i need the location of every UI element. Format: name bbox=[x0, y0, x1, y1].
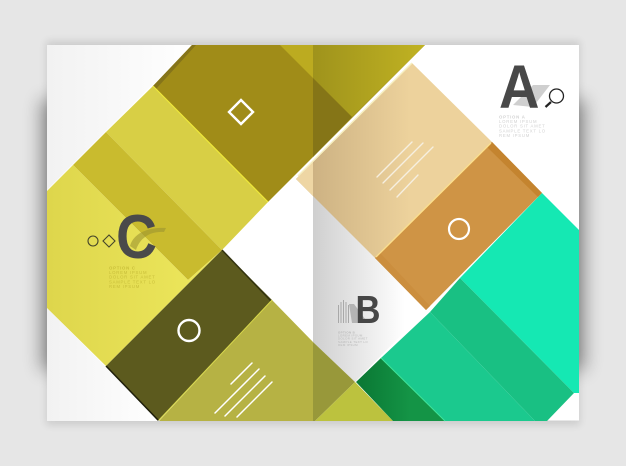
page bbox=[47, 45, 579, 420]
icon: text lines bbox=[377, 142, 433, 197]
panel: orange band with circle bbox=[375, 142, 542, 310]
text block: option A: DOLOR SIT AMET bbox=[499, 124, 545, 129]
heading: letter B: B bbox=[356, 289, 380, 332]
text block: option A bbox=[499, 114, 546, 138]
icon: bars bbox=[338, 300, 348, 323]
text block: option B: DOLOR SIT AMET bbox=[338, 337, 368, 341]
text block: option C bbox=[109, 266, 156, 289]
text block: option C: DOLOR SIT AMET bbox=[109, 275, 155, 280]
panel: light olive with lines bbox=[159, 300, 393, 421]
letter shadow: B bbox=[349, 304, 368, 323]
text block: option C: LOREM IPSUM bbox=[109, 270, 147, 275]
icon: magnifier bbox=[546, 89, 564, 107]
text block: option B: REM IPSUM bbox=[338, 343, 358, 347]
panel: teal square bbox=[356, 193, 579, 421]
letter shadow: A bbox=[513, 85, 550, 107]
letter block: B bbox=[338, 289, 380, 347]
white panel: bottom left bbox=[47, 308, 160, 421]
page shadow bbox=[41, 41, 585, 425]
icon: diamond bbox=[229, 100, 253, 124]
panel: dark olive band with circle bbox=[106, 250, 272, 421]
panel: tan square with lines bbox=[296, 63, 492, 258]
text block: option B: SAMPLE TEXT LO bbox=[338, 340, 368, 344]
icon: small diamond bbox=[103, 235, 115, 247]
panel: yellow band with letter C bbox=[47, 86, 268, 366]
white panel: top left bbox=[47, 45, 192, 190]
text block: option C: SAMPLE TEXT LO bbox=[109, 279, 156, 284]
letter block: A bbox=[499, 53, 564, 138]
icon: circle bbox=[449, 219, 469, 239]
text block: option B: OPTION B bbox=[338, 330, 355, 334]
heading: letter A: A bbox=[499, 53, 540, 121]
panel: olive square with diamond bbox=[153, 45, 425, 202]
text block: option B bbox=[338, 330, 368, 347]
text block: option C: REM IPSUM bbox=[109, 284, 140, 289]
text block: option A: REM IPSUM bbox=[499, 133, 530, 138]
letter shadow: C bbox=[130, 228, 166, 250]
text block: option C: OPTION C bbox=[109, 266, 136, 270]
text block: option A: SAMPLE TEXT LO bbox=[499, 128, 546, 133]
icon: text lines bbox=[215, 363, 272, 417]
white panel: central fold gradient bbox=[313, 195, 426, 382]
icon: circle bbox=[178, 320, 200, 341]
text block: option A: LOREM IPSUM bbox=[499, 119, 537, 124]
text block: option B: LOREM IPSUM bbox=[338, 334, 363, 338]
heading: letter C: C bbox=[116, 203, 157, 272]
icon: small circle bbox=[88, 236, 98, 246]
text block: option A: OPTION A bbox=[499, 114, 526, 120]
